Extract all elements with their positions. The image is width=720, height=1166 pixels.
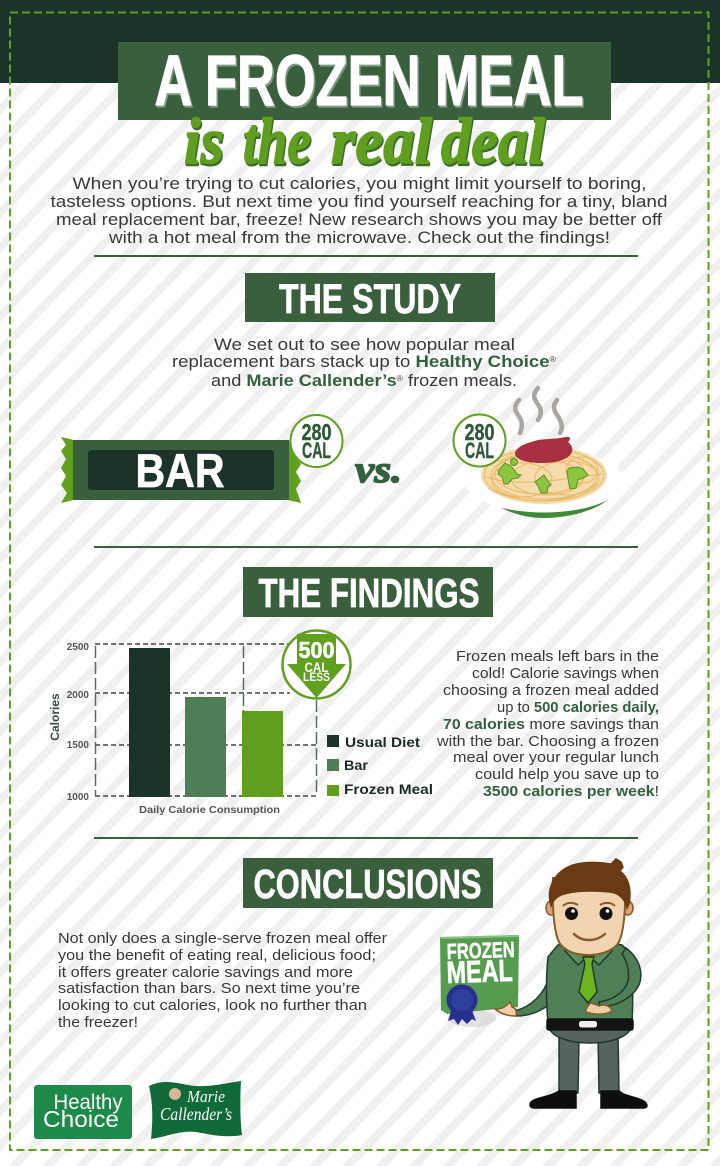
icon: meal replacement bar <box>61 437 301 503</box>
subtitle script: the <box>244 107 312 180</box>
subtitle script: the <box>243 105 311 178</box>
logo: marie callender's: Callender’s <box>160 1104 232 1124</box>
shirt <box>546 942 633 1023</box>
subtitle script <box>184 105 547 180</box>
badge: 500 cal less: CAL <box>304 659 329 675</box>
shoes <box>530 1091 647 1108</box>
findings text: meal over your regular lunch <box>453 749 659 766</box>
calorie badge: bar: CAL <box>302 438 331 463</box>
logo: healthy choice: Choice <box>43 1106 119 1132</box>
icon: frozen meal box <box>440 935 519 1027</box>
heading: the findings: THE FINDINGS <box>258 570 480 616</box>
subtitle script: is <box>185 107 225 180</box>
right hand <box>586 1003 612 1014</box>
tie <box>579 957 597 1003</box>
bar chart: daily calorie consumption: 2500 <box>67 642 89 653</box>
hair <box>549 859 630 908</box>
intro text: meal replacement bar, freeze! New research shows you may be better off <box>56 210 662 229</box>
belt buckle <box>579 1021 597 1028</box>
conclusions text: it offers greater calorie savings and more <box>58 964 353 981</box>
badge: 500 cal less <box>282 630 350 698</box>
bar chart: daily calorie consumption: Calories <box>48 693 62 741</box>
right ear <box>623 901 633 915</box>
study description <box>172 335 556 390</box>
chart legend: Frozen Meal <box>344 781 433 797</box>
subtitle script: deal <box>442 107 547 180</box>
heading: conclusions: CONCLUSIONS <box>254 861 482 907</box>
findings text: cold! Calorie savings when <box>472 665 659 682</box>
findings text <box>436 648 659 800</box>
chart legend <box>327 734 433 797</box>
findings text: could help you save up to <box>475 766 659 783</box>
conclusions text: Not only does a single-serve frozen meal offer <box>58 930 387 947</box>
bar chart: daily calorie consumption: 1500 <box>67 740 89 751</box>
findings text: Frozen meals left bars in the <box>456 648 659 665</box>
conclusions text: satisfaction than bars. So next time you’re <box>58 980 360 997</box>
subtitle script: real <box>331 105 433 178</box>
findings text: choosing a frozen meal added <box>443 682 659 699</box>
intro text: with a hot meal from the microwave. Check out the findings! <box>108 228 610 247</box>
legs <box>559 1035 619 1093</box>
badge: 500 cal less: LESS <box>303 670 330 684</box>
calorie badge: meal: CAL <box>465 438 494 463</box>
logo: healthy choice: Healthy <box>54 1091 123 1114</box>
logo: marie callender's <box>149 1081 242 1139</box>
face <box>553 878 625 955</box>
belt <box>547 1019 633 1030</box>
calorie badge: meal: 280 <box>464 419 494 445</box>
logo: healthy choice <box>34 1085 132 1139</box>
left ear <box>546 901 556 915</box>
bar chart: daily calorie consumption: 2000 <box>67 690 89 701</box>
smile <box>574 934 605 940</box>
intro text <box>50 174 668 247</box>
left arm <box>515 978 557 1016</box>
icon: spaghetti plate <box>464 388 624 518</box>
icon: meal replacement bar: BAR <box>136 444 224 497</box>
chart legend: Usual Diet <box>345 734 420 750</box>
badge: 500 cal less: 500 <box>298 637 334 663</box>
belly <box>549 1028 631 1043</box>
bar chart: daily calorie consumption <box>48 642 316 816</box>
subtitle script: deal <box>441 105 546 178</box>
study description: ® <box>397 374 403 383</box>
calorie badge: bar: 280 <box>302 419 332 445</box>
header band <box>0 0 720 83</box>
study description: We set out to see how popular meal <box>214 335 515 354</box>
bar chart: daily calorie consumption: 1000 <box>67 792 89 803</box>
calorie badge: bar <box>290 415 342 467</box>
collar <box>565 947 612 965</box>
icon: frozen meal box: MEAL <box>446 953 513 990</box>
heading: the study: THE STUDY <box>279 275 461 322</box>
conclusions text <box>58 930 387 1031</box>
findings text: with the bar. Choosing a frozen <box>436 733 659 750</box>
bar chart: daily calorie consumption: Daily Calorie Consumption <box>139 804 280 816</box>
conclusions text: the freezer! <box>58 1014 138 1031</box>
logo: marie callender's: Marie <box>186 1087 225 1106</box>
eyes <box>565 907 612 920</box>
versus label: vs. <box>355 449 402 491</box>
study description: ® <box>550 355 556 364</box>
title: A FROZEN MEAL <box>156 44 585 123</box>
subtitle script: real <box>332 107 434 180</box>
intro text: tasteless options. But next time you find yourself reaching for a tiny, bland <box>50 192 668 211</box>
findings text: 70 calories more savings than <box>443 716 659 733</box>
icon: frozen meal box: FROZEN <box>446 937 515 964</box>
right arm <box>599 948 641 1006</box>
conclusions text: looking to cut calories, look no further than <box>58 997 367 1014</box>
illustration: man presenting meal <box>495 859 647 1108</box>
findings text: 3500 calories per week ! <box>483 783 659 800</box>
study description: frozen meals. <box>403 371 517 390</box>
eyebrows <box>563 903 615 906</box>
calorie badge: meal <box>454 414 506 466</box>
subtitle script: is <box>184 105 224 178</box>
findings text: up to 500 calories daily, <box>497 699 659 716</box>
left hand <box>495 1002 516 1016</box>
title: A FROZEN MEAL <box>154 42 584 121</box>
study description: and Marie Callender’s <box>211 371 387 390</box>
intro text: When you’re trying to cut calories, you might limit yourself to boring, <box>72 174 646 193</box>
study description: replacement bars stack up to Healthy Choice <box>172 352 538 371</box>
conclusions text: you the benefit of eating real, delicious food; <box>58 947 376 964</box>
chart legend: Bar <box>344 757 369 773</box>
